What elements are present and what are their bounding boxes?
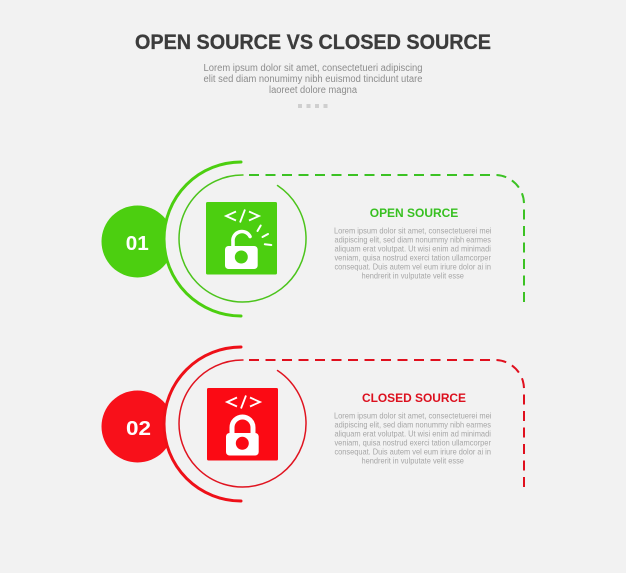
body text: open source: aliquam erat volutpat. Ut wisi enim ad minimadi <box>334 244 491 254</box>
pagination dots <box>298 104 328 108</box>
body text: open source <box>334 226 492 280</box>
body text: closed source: consequat. Duis autem vel eum iriure dolor ai in <box>334 448 491 456</box>
body text: open source: consequat. Duis autem vel eum iriure dolor ai in <box>334 262 491 272</box>
body text: closed source: hendrerit in vulputate velit esse <box>361 456 464 466</box>
body text: closed source: aliquam erat volutpat. Ut wisi enim ad minimadi <box>334 430 491 438</box>
subtitle text <box>204 63 423 96</box>
body text: open source: adipiscing elit, sed diam nonummy nibh earmes <box>334 236 491 244</box>
inner ring <box>179 360 306 487</box>
icon: closed padlock with code tag <box>207 388 278 460</box>
body text: open source: hendrerit in vulputate velit esse <box>361 272 464 280</box>
body text: open source: veniam, quisa nostrud exerci tation ullamcorper <box>334 254 491 262</box>
title: OPEN SOURCE VS CLOSED SOURCE <box>135 30 491 54</box>
heading: open source: OPEN SOURCE <box>370 206 458 220</box>
panel: closed source <box>102 347 524 501</box>
number badge 01: 01 <box>126 233 149 255</box>
subtitle text: Lorem ipsum dolor sit amet, consectetueri adipiscing <box>204 63 422 74</box>
body text: closed source: veniam, quisa nostrud exerci tation ullamcorper <box>334 438 491 448</box>
inner ring <box>179 175 306 302</box>
number badge 02: 02 <box>126 418 151 440</box>
body text: closed source: Lorem ipsum dolor sit amet, consectetuerei mei <box>334 412 492 420</box>
body text: closed source: adipiscing elit, sed diam nonummy nibh earmes <box>334 420 491 430</box>
outer arc <box>164 162 241 316</box>
subtitle text: elit sed diam nonumimy nibh euismod tincidunt utare <box>204 74 423 85</box>
body text: open source: Lorem ipsum dolor sit amet, consectetuerei mei <box>334 226 492 236</box>
body text: closed source <box>334 412 492 466</box>
dashed connector <box>249 175 524 303</box>
number badge 01 <box>102 163 317 315</box>
outer arc <box>164 347 241 501</box>
number badge 02 <box>102 348 317 500</box>
panel: open source <box>102 162 524 316</box>
icon: open padlock with code tag <box>206 202 277 274</box>
subtitle text: laoreet dolore magna <box>269 85 357 96</box>
heading: closed source: CLOSED SOURCE <box>362 391 466 405</box>
dashed connector <box>249 360 524 488</box>
